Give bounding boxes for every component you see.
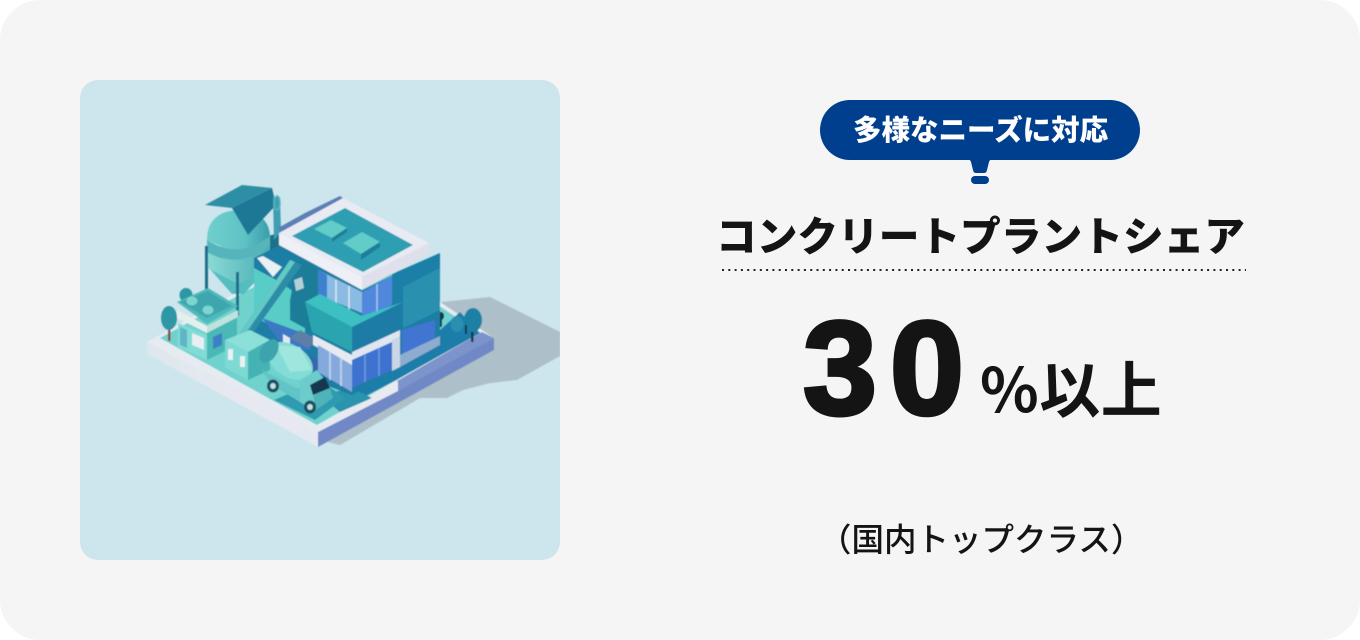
- small left building: [177, 288, 238, 360]
- lower left wing: [262, 318, 312, 350]
- callout text: 多様なニーズに対応: [853, 108, 1108, 149]
- lower windows: [318, 345, 352, 392]
- illustration: isometric concrete plant: [80, 80, 560, 560]
- conveyor: [240, 260, 304, 340]
- silo: [205, 185, 282, 316]
- ground shadow: [320, 297, 560, 445]
- roof: [278, 196, 344, 233]
- trees right: [438, 308, 482, 342]
- heading: コンクリートプラントシェア: [716, 204, 1245, 263]
- note: （国内トップクラス）: [819, 514, 1143, 561]
- callout: pill badge: [820, 100, 1140, 184]
- stat: 30: 30: [803, 295, 977, 443]
- tree left: [161, 288, 192, 341]
- front panel: [403, 268, 440, 328]
- dotted divider: [722, 269, 1246, 271]
- low plant block: [225, 330, 270, 380]
- white band lower: [313, 335, 352, 366]
- back panel: [392, 253, 440, 276]
- mixer truck: [260, 339, 336, 420]
- platform: [147, 272, 494, 448]
- white beam: [257, 256, 282, 277]
- mid block: [305, 302, 352, 352]
- upper windows: [318, 270, 362, 313]
- stat unit: %以上: [980, 341, 1162, 430]
- main building: [254, 196, 440, 395]
